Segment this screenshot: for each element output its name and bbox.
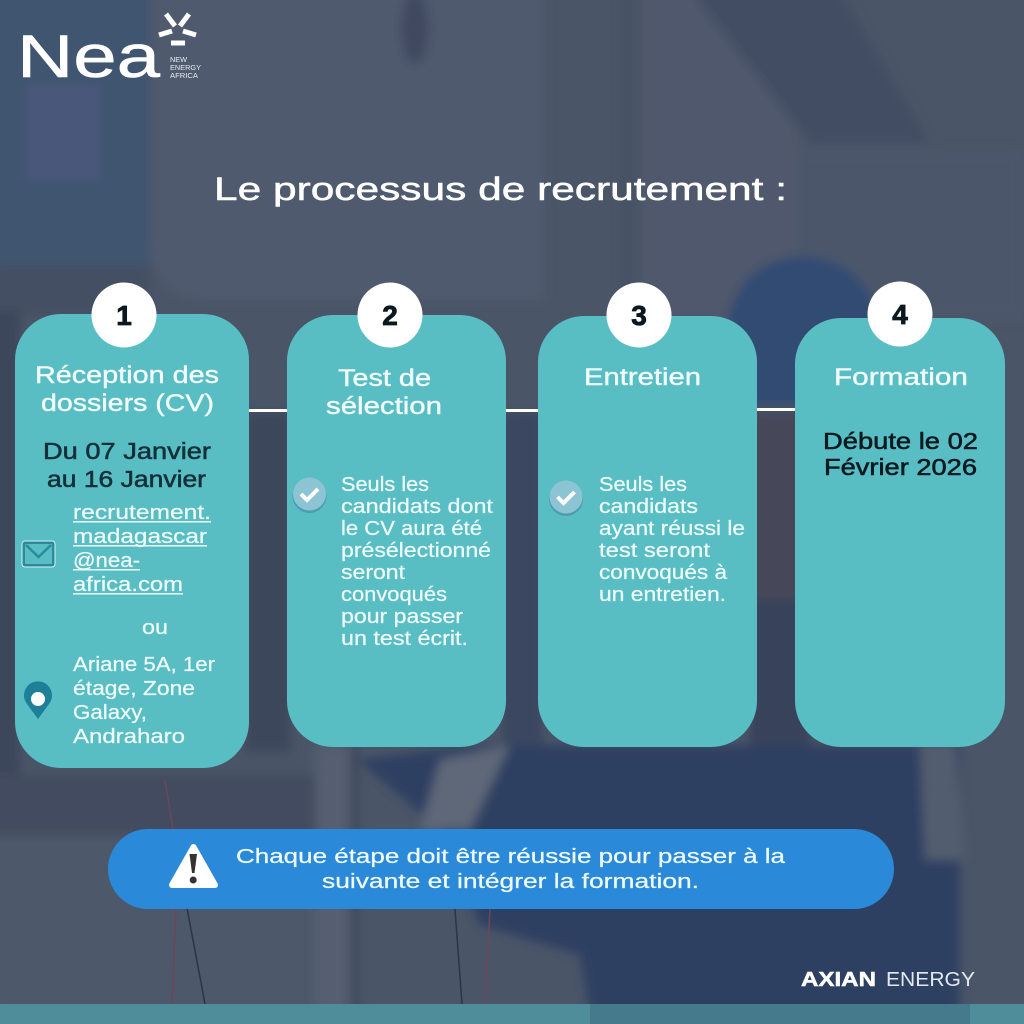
icon: check xyxy=(292,478,326,513)
heading: test xyxy=(326,365,442,420)
body text: convoqués à xyxy=(599,562,728,584)
body text: le CV aura été xyxy=(341,518,482,540)
connector lines between steps xyxy=(249,408,795,412)
icon: check xyxy=(549,480,583,516)
logo: Axian Energy xyxy=(801,969,975,991)
start date xyxy=(823,428,978,480)
step number 3: 3 xyxy=(631,300,647,331)
title: Le processus de recrutement : xyxy=(214,171,787,207)
warning text xyxy=(236,846,786,893)
warning text: suivante et intégrer la formation. xyxy=(322,871,699,893)
icon: envelope xyxy=(22,541,55,567)
step number 4: 4 xyxy=(892,299,908,330)
icon: warning triangle xyxy=(172,847,215,885)
email address: africa.com xyxy=(73,574,183,596)
address: Galaxy, xyxy=(73,702,147,724)
panel: step 2 test xyxy=(287,282,506,747)
step number 1 xyxy=(92,282,156,348)
wires xyxy=(165,780,490,1004)
bottom band xyxy=(0,1004,1024,1024)
body text: pour passer xyxy=(341,606,463,628)
address: Ariane 5A, 1er xyxy=(73,654,215,676)
logo: Axian Energy: AXIAN xyxy=(801,969,876,991)
body text: candidats dont xyxy=(341,496,494,518)
heading: training: Formation xyxy=(834,364,968,391)
body text: présélectionné xyxy=(341,540,491,562)
body text: Seuls les xyxy=(599,474,687,496)
warning text: Chaque étape doit être réussie pour passer à la xyxy=(236,846,786,868)
panel: step 1 reception xyxy=(15,282,249,768)
logo: Nea New Energy Africa: AFRICA xyxy=(170,71,198,80)
logo: Nea New Energy Africa xyxy=(17,14,201,90)
heading: test: Test de xyxy=(338,365,431,392)
body text: Seuls les xyxy=(341,474,429,496)
start date: Février 2026 xyxy=(824,454,977,480)
logo: Nea New Energy Africa: Nea xyxy=(17,23,161,90)
start date: Débute le 02 xyxy=(823,428,978,454)
body text: un test écrit. xyxy=(341,628,468,650)
heading: interview: Entretien xyxy=(584,364,701,391)
heading: reception: dossiers (CV) xyxy=(41,390,214,417)
dates: au 16 Janvier xyxy=(47,466,206,492)
step number 2: 2 xyxy=(382,300,398,331)
step number 4 xyxy=(868,282,932,346)
address: Andraharo xyxy=(73,726,185,748)
email address: madagascar xyxy=(73,526,207,548)
email address: @nea- xyxy=(73,550,140,572)
address xyxy=(73,654,215,748)
body text: seront xyxy=(341,562,406,584)
address: étage, Zone xyxy=(73,678,195,700)
body text: un entretien. xyxy=(599,584,726,606)
panel: step 3 interview xyxy=(538,282,757,747)
logo: Nea New Energy Africa: ENERGY xyxy=(170,63,201,72)
body text xyxy=(599,474,745,606)
panel: step 4 training xyxy=(795,282,1005,747)
step number 2 xyxy=(358,282,422,348)
heading: reception xyxy=(35,362,219,417)
body text xyxy=(341,474,494,650)
text: or: ou xyxy=(142,617,168,639)
icon: sun rays xyxy=(159,14,196,43)
callout: warning banner xyxy=(108,829,894,909)
email address xyxy=(73,502,211,596)
icon: location pin xyxy=(24,681,52,719)
logo: Nea New Energy Africa: NEW xyxy=(170,55,188,64)
dates xyxy=(43,438,211,492)
body text: candidats xyxy=(599,496,698,518)
email address: recrutement. xyxy=(73,502,211,524)
heading: reception: Réception des xyxy=(35,362,219,389)
body text: ayant réussi le xyxy=(599,518,745,540)
dates: Du 07 Janvier xyxy=(43,438,211,464)
step number 3 xyxy=(606,282,672,348)
logo: Axian Energy: ENERGY xyxy=(886,969,975,991)
body text: test seront xyxy=(599,540,711,562)
step number 1: 1 xyxy=(116,300,132,331)
body text: convoqués xyxy=(341,584,447,606)
heading: test: sélection xyxy=(326,393,442,420)
